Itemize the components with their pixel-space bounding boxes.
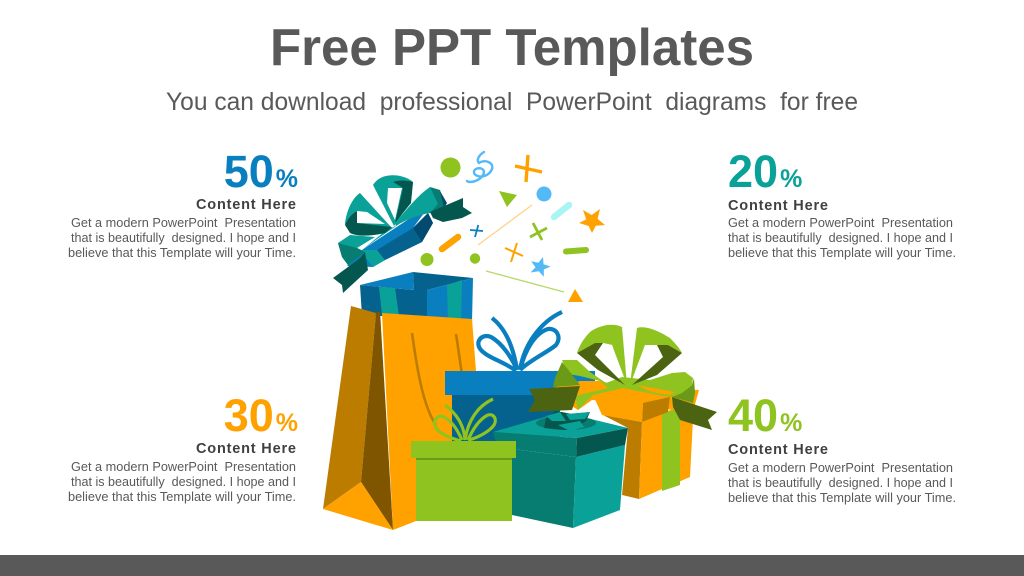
block: 30% bottom-left: 30%: [224, 390, 298, 441]
block: 30% bottom-left: believe that this Template will your Time.: [68, 490, 296, 504]
block: 30% bottom-left: Content Here: [196, 441, 296, 457]
footer bar: [0, 555, 1024, 576]
orange gift box with green bow: [528, 325, 717, 499]
block: 50% top-left: that is beautifully designed. I hope and I: [71, 231, 296, 245]
green gift box: [411, 399, 516, 521]
block: 40% bottom-right: Get a modern PowerPoint Presentation: [728, 461, 953, 475]
block: 30% bottom-left: [68, 390, 298, 504]
block: 20% top-right: 20%: [728, 146, 802, 197]
block: 20% top-right: [728, 146, 956, 260]
block: 40% bottom-right: 40%: [728, 390, 802, 441]
open box base with striped interior: [360, 272, 473, 322]
blue gift box: [445, 312, 595, 445]
subtitle: You can download professional PowerPoint diagrams for free: [166, 88, 858, 116]
block: 20% top-right: that is beautifully designed. I hope and I: [728, 231, 953, 245]
block: 30% bottom-left: Get a modern PowerPoint Presentation: [71, 460, 296, 474]
block: 40% bottom-right: that is beautifully designed. I hope and I: [728, 476, 953, 490]
block: 40% bottom-right: [728, 390, 956, 505]
open lid with teal bow: [333, 175, 472, 293]
block: 40% bottom-right: Content Here: [728, 442, 828, 458]
block: 50% top-left: Get a modern PowerPoint Presentation: [71, 216, 296, 230]
block: 50% top-left: [68, 146, 298, 260]
block: 20% top-right: believe that this Template will your Time.: [728, 246, 956, 260]
block: 30% bottom-left: that is beautifully designed. I hope and I: [71, 475, 296, 489]
title: Free PPT Templates: [270, 19, 754, 77]
shopping bag: [323, 306, 480, 530]
block: 40% bottom-right: believe that this Template will your Time.: [728, 491, 956, 505]
block: 20% top-right: Content Here: [728, 198, 828, 214]
teal gift box with small bow: [493, 411, 628, 528]
block: 50% top-left: 50%: [224, 146, 298, 197]
block: 20% top-right: Get a modern PowerPoint Presentation: [728, 216, 953, 230]
block: 50% top-left: believe that this Template will your Time.: [68, 246, 296, 260]
block: 50% top-left: Content Here: [196, 197, 296, 213]
confetti: [420, 152, 605, 302]
